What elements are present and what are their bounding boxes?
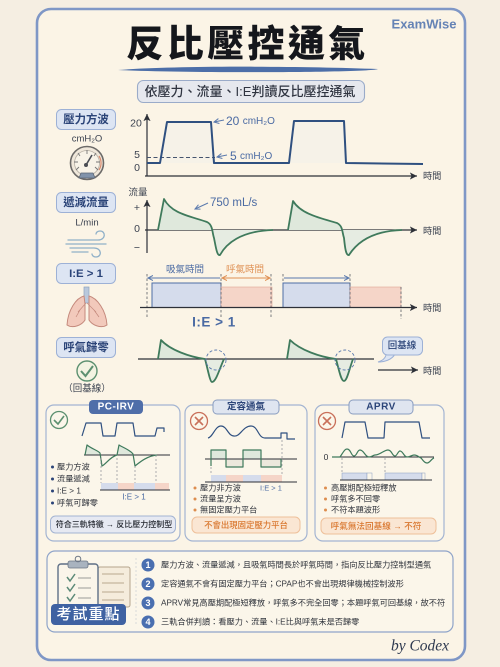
unit: cmH2O: cmH₂O (72, 134, 102, 144)
mini charts: I:E > 1 (260, 484, 282, 492)
pressure chart: 5 (134, 149, 140, 161)
mini charts: I:E > 1 (122, 492, 146, 502)
callout: baseline (378, 337, 422, 362)
panel: flow row (56, 186, 441, 257)
callout: 750 mL/s: 750 mL/s (210, 197, 258, 209)
conclusion (192, 517, 300, 533)
bullet list (324, 482, 397, 514)
header: PC-IRV (89, 400, 143, 414)
pressure chart (130, 114, 441, 181)
bullet list: 壓力非方波 (200, 482, 241, 492)
header: PC-IRV: PC-IRV (98, 402, 134, 412)
key point 4 (142, 616, 359, 628)
badge: exam key points: 考試重點 (56, 606, 121, 623)
timing bars chart: 吸氣時間 (166, 264, 204, 276)
label: pressure waveform (56, 110, 116, 130)
flow chart: + (134, 202, 140, 214)
flow chart: 0 (134, 223, 140, 235)
label: I:E > 1 (56, 264, 116, 284)
key point 3 (142, 596, 445, 610)
callout: 20 cmH2O: 20 cmH₂O (226, 114, 275, 128)
header: volume control (213, 400, 279, 414)
callout: baseline: 回基線 (388, 340, 417, 352)
note: baseline: （回基線） (63, 382, 111, 394)
bullet list: 呼氣多不回零 (331, 494, 380, 504)
key point 2: 定容通氣不會有固定壓力平台；CPAP也不會出現規律機械控制波形 (161, 578, 404, 588)
icon: cross (318, 412, 336, 430)
icon: pressure gauge (70, 146, 104, 180)
header: volume control: 定容通氣 (227, 400, 265, 412)
conclusion: 呼氣無法回基線 → 不符 (331, 520, 422, 531)
panel: I:E row (56, 264, 441, 330)
label: decelerating flow (56, 192, 116, 212)
pressure chart: 0 (134, 162, 140, 174)
icon: clipboard (58, 556, 130, 610)
key point 3: 3 (145, 598, 151, 608)
timing bars chart (140, 264, 441, 330)
bullet list: 無固定壓力平台 (200, 504, 257, 514)
key point 1 (142, 558, 431, 572)
callout: 5 cmH2O: 5 cmH₂O (230, 149, 272, 163)
pressure chart: 20 (130, 118, 142, 130)
badge: exam key points (51, 604, 126, 625)
icon: check (77, 361, 97, 381)
flow chart (128, 186, 441, 255)
bullet list: 流量遞減 (57, 474, 90, 484)
bullet list: I:E > 1 (57, 486, 81, 496)
conclusion (321, 518, 436, 534)
key point 4: 三軌合併判讀：看壓力、流量、I:E比與呼氣末是否歸零 (161, 616, 359, 626)
timing bars chart: 時間 (423, 303, 441, 313)
bullet list: 呼氣可歸零 (57, 498, 98, 508)
key point 1: 1 (145, 560, 151, 570)
mini charts: 0 (324, 452, 329, 462)
subtitle (138, 80, 364, 102)
icon: check (50, 412, 68, 428)
timing bars chart: I:E > 1 (192, 314, 236, 330)
mini charts (205, 426, 297, 492)
timing bars chart: 呼氣時間 (226, 264, 264, 276)
bullet list: 不符本題波形 (331, 504, 380, 514)
label: expiratory return to zero (56, 338, 116, 358)
icon: cross (190, 412, 208, 430)
title: 反比壓控通氣 (126, 24, 369, 64)
bullet list: 流量呈方波 (200, 494, 241, 504)
panel: exam key points (47, 551, 453, 632)
key point 3: APRV常見高壓期配極短釋放，呼氣多不完全回零；本題呼氣可回基線，故不符 (161, 598, 445, 608)
label: pressure waveform: 壓力方波 (63, 112, 109, 126)
conclusion: 符合三軌特徵 → 反比壓力控制型 (56, 519, 172, 529)
time axis: 時間 (423, 366, 441, 376)
key point 1: 壓力方波、流量遞減，且吸氣時間長於呼氣時間，指向反比壓力控制型通氣 (161, 560, 431, 570)
header: APRV (349, 400, 413, 414)
pressure chart: 時間 (423, 171, 441, 181)
key point 2: 2 (145, 579, 151, 589)
bullet list: 壓力方波 (57, 462, 90, 472)
icon: wind (66, 231, 106, 257)
flow chart: − (134, 242, 140, 254)
label: decelerating flow: 遞減流量 (63, 195, 109, 209)
brand: ExamWise: ExamWise (392, 16, 456, 32)
key point 2 (142, 578, 404, 590)
mini charts (324, 422, 434, 480)
conclusion: 不會出現固定壓力平台 (204, 520, 288, 530)
flow chart: 時間 (423, 226, 441, 236)
signature: by Codex (391, 638, 449, 654)
panel: APRV (315, 400, 444, 541)
bullet list: 高壓期配極短釋放 (331, 482, 397, 492)
panel: return to zero row (56, 337, 441, 394)
bullet list (51, 462, 98, 508)
divider (135, 558, 137, 626)
bullet list (194, 482, 257, 514)
time axis (378, 366, 441, 376)
label: I:E > 1: I:E > 1 (69, 268, 104, 280)
panel: pressure row (56, 110, 441, 181)
key point 4: 4 (145, 617, 151, 627)
return to baseline chart (138, 340, 374, 382)
panel: volume control (185, 400, 307, 541)
conclusion (50, 516, 176, 533)
flow chart: 流量 (128, 186, 148, 198)
subtitle: 依壓力、流量、I:E判讀反比壓控通氣 (145, 84, 355, 99)
label: expiratory return to zero: 呼氣歸零 (63, 340, 109, 354)
icon: lungs (67, 287, 107, 327)
header: APRV: APRV (366, 402, 396, 412)
title underline (118, 67, 378, 72)
panel: PC-IRV (46, 400, 180, 541)
unit: L/min: L/min (75, 218, 99, 228)
mini charts (82, 423, 170, 502)
